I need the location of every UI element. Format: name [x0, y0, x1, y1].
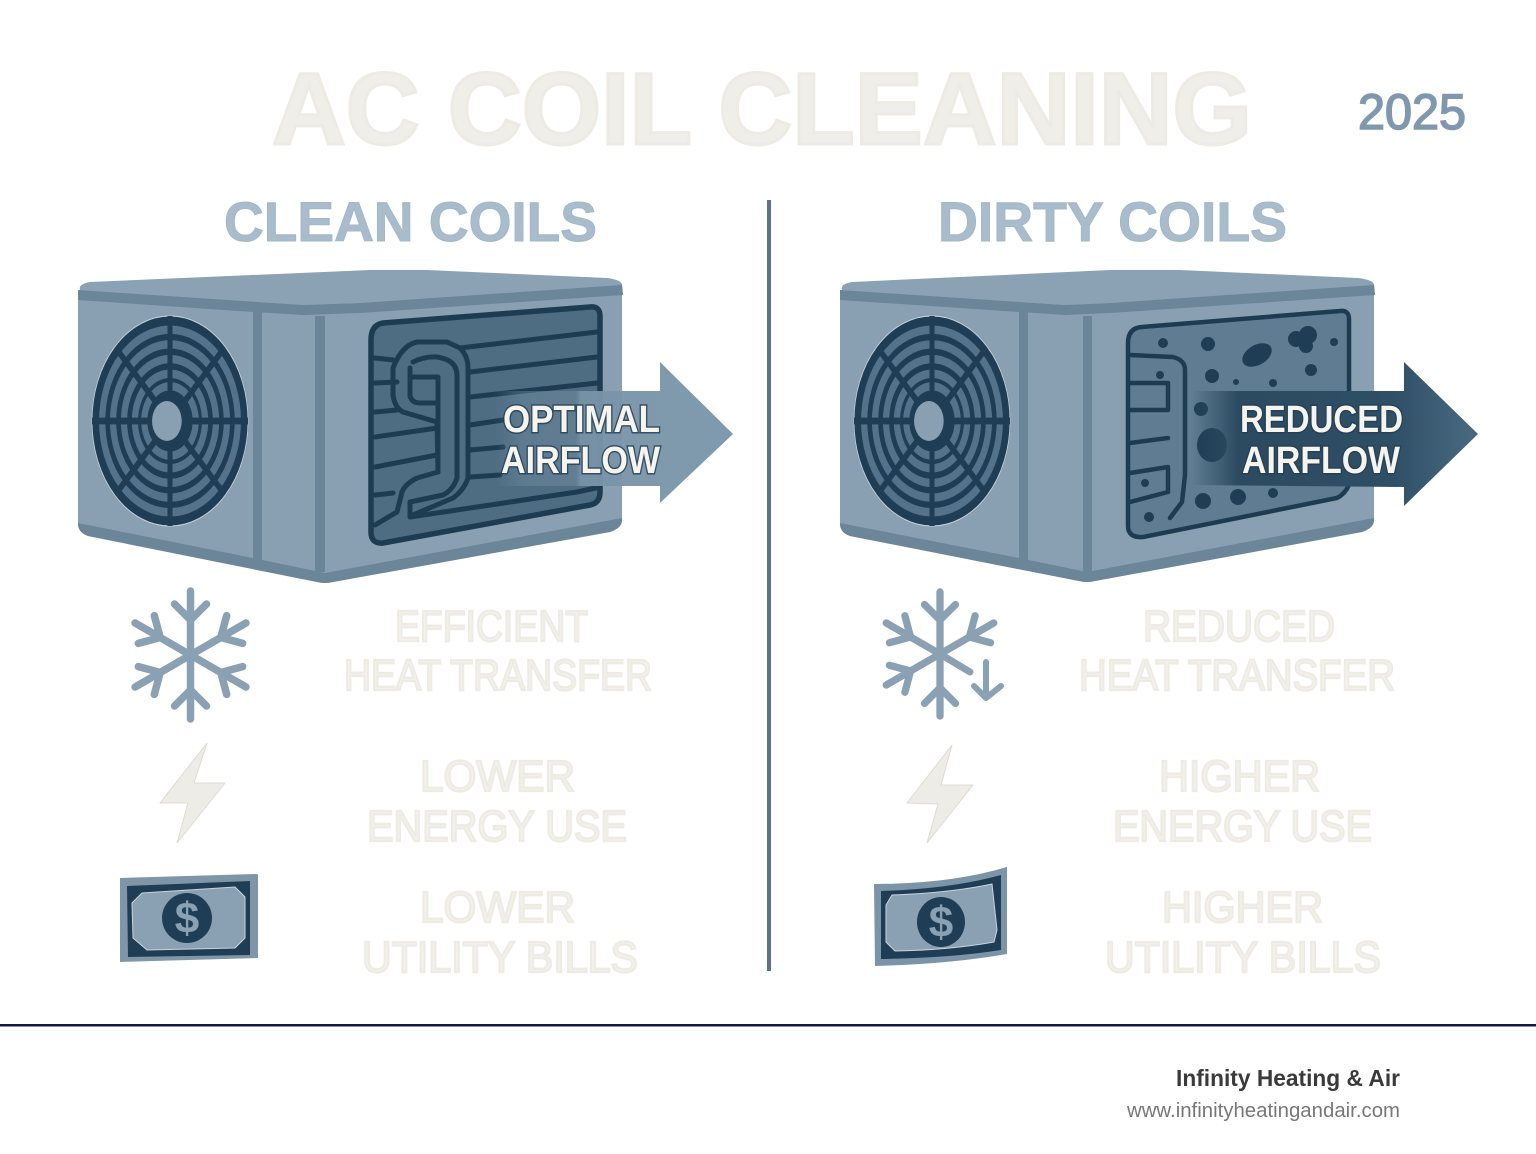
text: efficient heat transfer — [344, 602, 652, 700]
footer: company name: Infinity Heating & Air — [1176, 1065, 1400, 1091]
icon: snowflake — [127, 591, 254, 719]
text: higher utility bills: HIGHER — [1162, 883, 1323, 932]
panel: clean AC unit — [78, 270, 733, 583]
panel: dirty AC unit — [840, 270, 1478, 582]
text: reduced heat transfer: REDUCED — [1143, 602, 1335, 651]
fan grille — [854, 316, 1010, 526]
icon: lightning bolt — [907, 745, 973, 843]
text: higher energy use — [1113, 752, 1372, 851]
center divider — [767, 200, 771, 971]
label: reduced airflow — [1240, 399, 1403, 482]
year label: 2025 — [1358, 84, 1466, 140]
title: AC COIL CLEANING — [272, 52, 1252, 166]
text: higher energy use: ENERGY USE — [1113, 802, 1372, 851]
label: optimal airflow: OPTIMAL — [503, 399, 660, 441]
icon: curved dollar bill — [874, 867, 1007, 966]
label: optimal airflow: AIRFLOW — [501, 440, 660, 482]
icon: dollar bill — [120, 874, 258, 962]
footer rule — [0, 1024, 1536, 1026]
clean coil panel — [371, 307, 600, 543]
text: higher energy use: HIGHER — [1159, 752, 1320, 801]
text: higher utility bills: UTILITY BILLS — [1105, 933, 1381, 982]
heading: dirty coils: DIRTY COILS — [938, 190, 1287, 253]
icon: dollar bill: $ — [175, 894, 199, 943]
fan grille — [92, 316, 248, 526]
label: reduced airflow: REDUCED — [1240, 399, 1403, 441]
text: lower energy use: ENERGY USE — [367, 802, 627, 851]
text: efficient heat transfer: HEAT TRANSFER — [344, 651, 652, 700]
unit cabinet — [78, 270, 623, 583]
icon: curved dollar bill: $ — [929, 898, 953, 947]
dirty coil panel — [1128, 311, 1349, 537]
label: reduced airflow: AIRFLOW — [1242, 440, 1400, 482]
icon: snowflake with down arrow — [878, 592, 1002, 716]
icon: lightning bolt — [160, 743, 225, 843]
text: reduced heat transfer: HEAT TRANSFER — [1079, 651, 1395, 700]
text: lower utility bills — [362, 883, 638, 982]
heading: clean coils: CLEAN COILS — [224, 190, 597, 253]
text: efficient heat transfer: EFFICIENT — [395, 602, 588, 651]
footer: website: www.infinityheatingandair.com — [1126, 1100, 1400, 1122]
text: reduced heat transfer — [1079, 602, 1395, 700]
text: lower utility bills: LOWER — [420, 883, 575, 932]
label: optimal airflow — [501, 399, 660, 482]
unit cabinet — [840, 270, 1375, 582]
arrow: reduced airflow — [1192, 362, 1478, 506]
arrow: optimal airflow — [495, 362, 733, 503]
text: lower energy use — [367, 752, 627, 851]
text: lower energy use: LOWER — [420, 752, 575, 801]
text: lower utility bills: UTILITY BILLS — [362, 933, 638, 982]
text: higher utility bills — [1105, 883, 1381, 982]
